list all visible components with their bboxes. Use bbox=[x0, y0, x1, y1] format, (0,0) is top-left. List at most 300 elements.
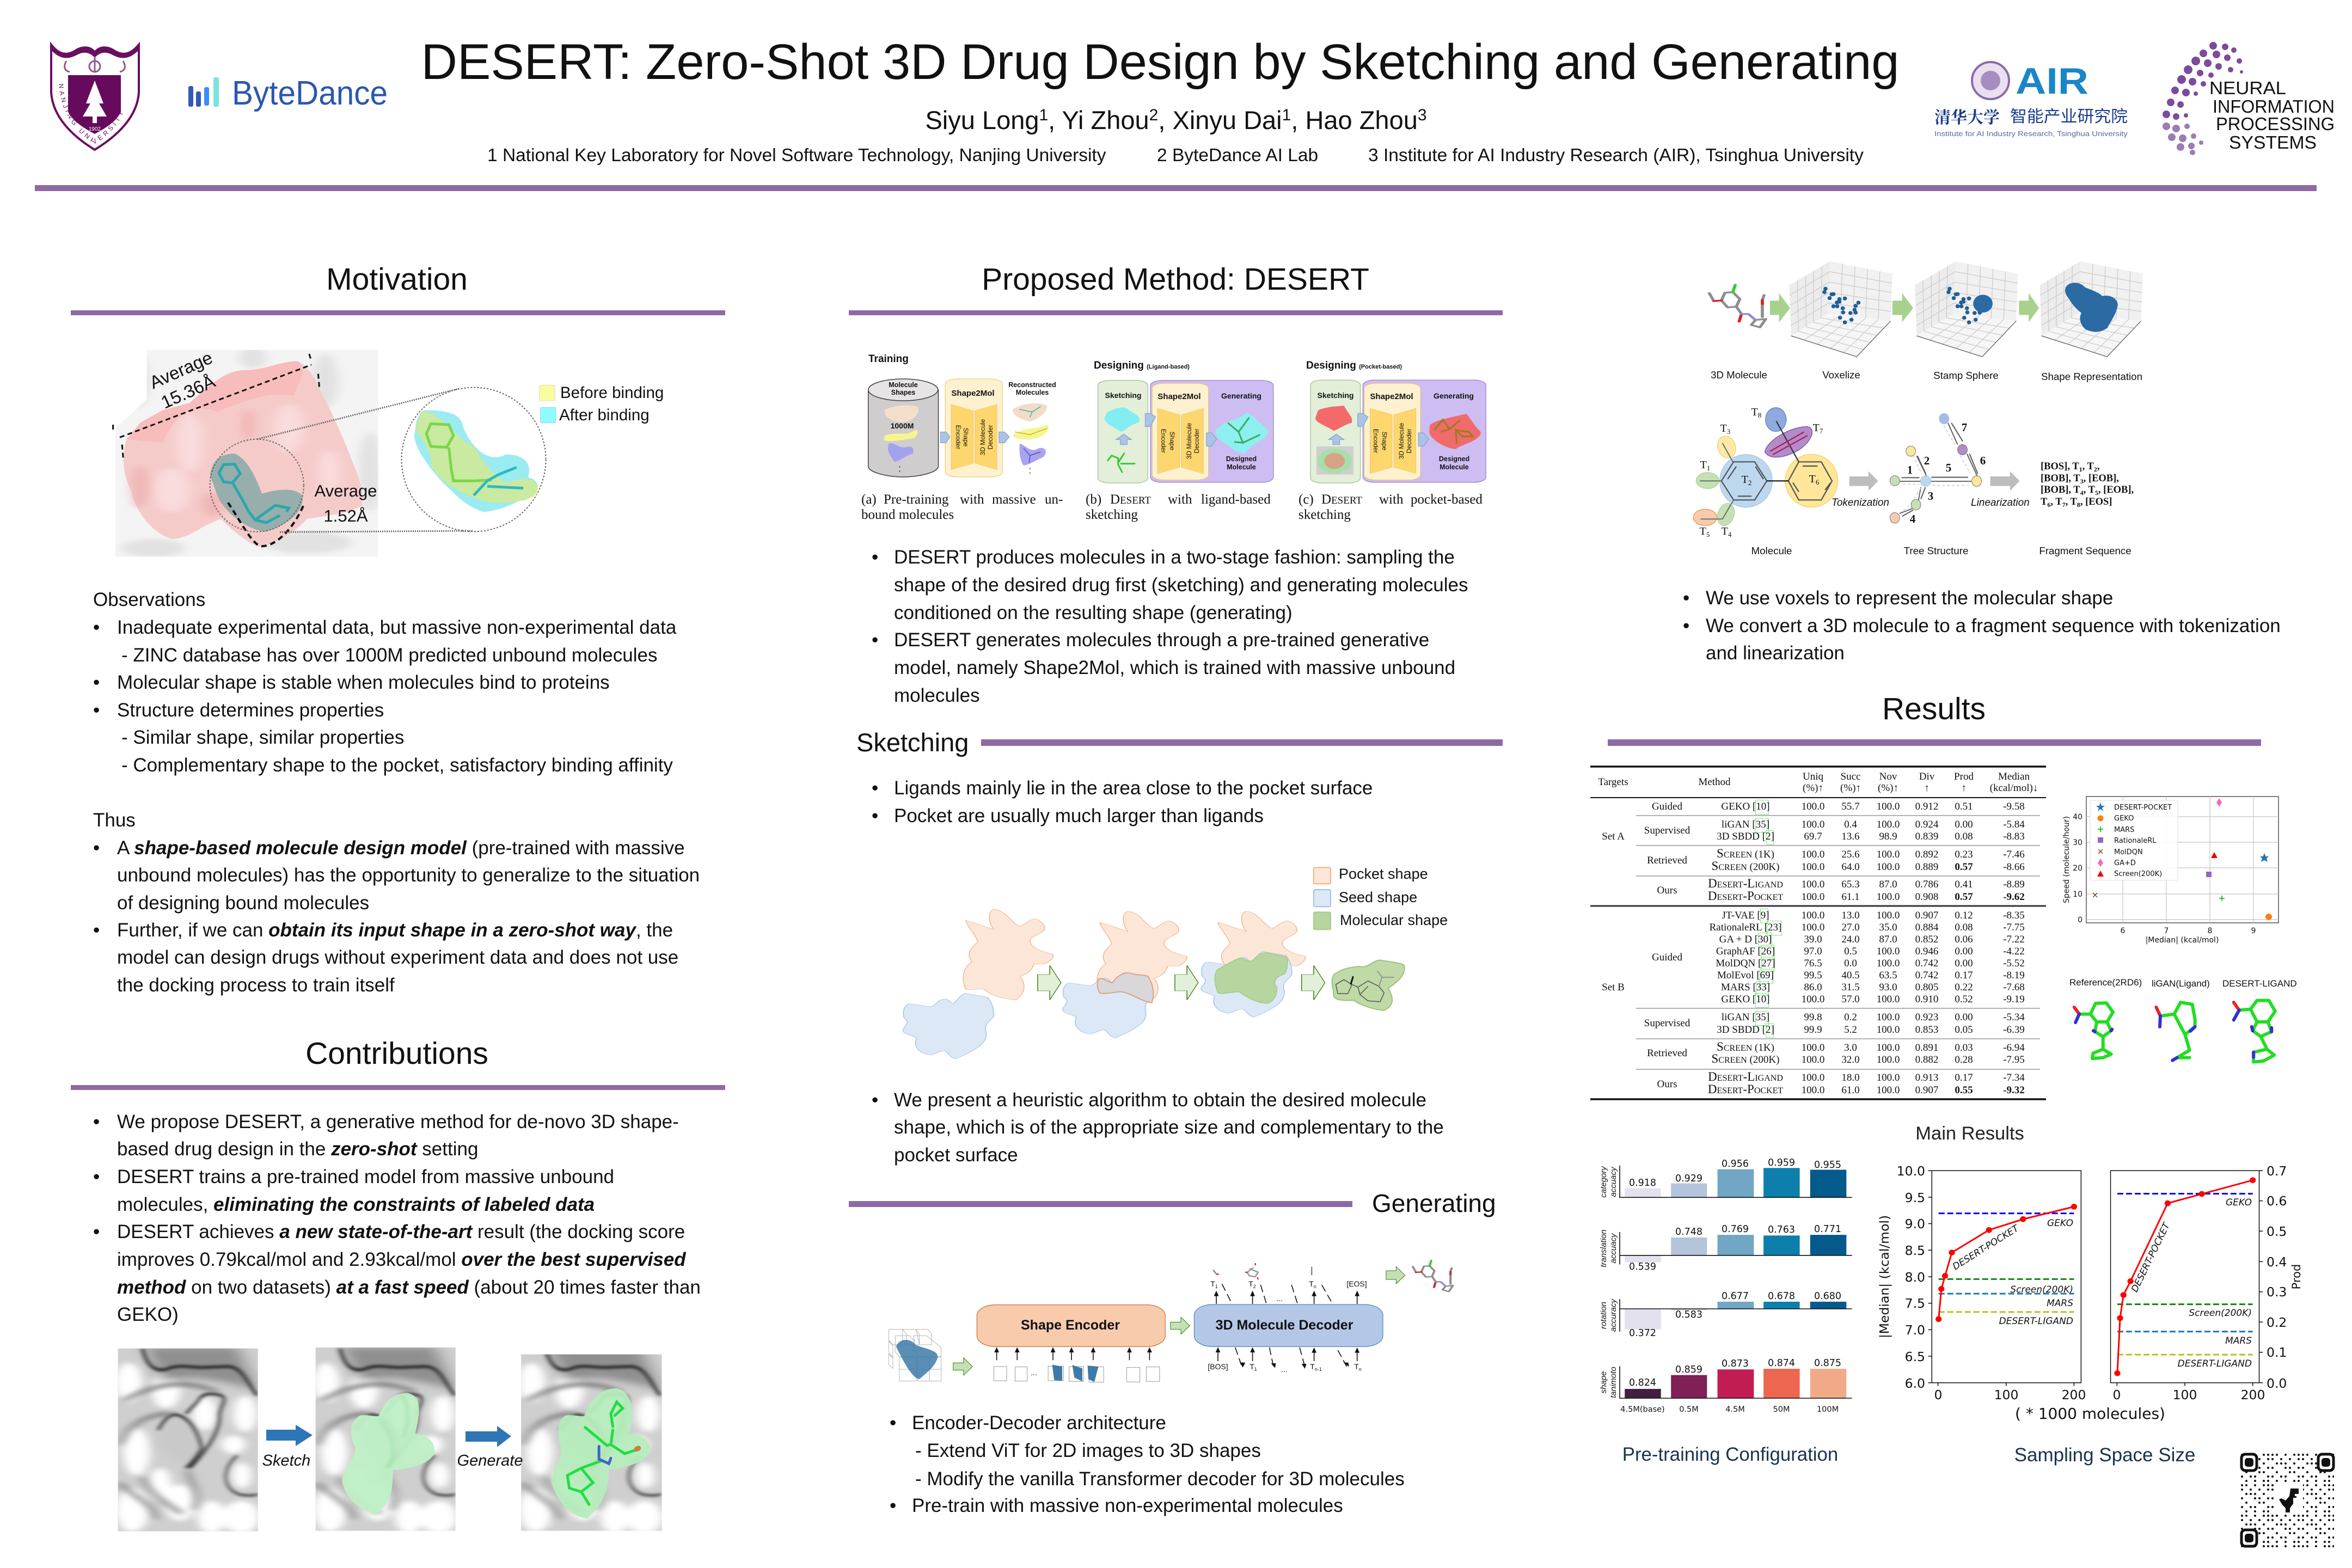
table rows: set B: 0.2 bbox=[1844, 1012, 1857, 1023]
text block: architecture notes bbox=[890, 1412, 1405, 1516]
table rows: set B: 100.0 bbox=[1877, 1012, 1900, 1023]
bar metric labels: accuacy bbox=[1609, 1233, 1618, 1264]
bar value labels bbox=[1629, 1157, 1841, 1388]
table rows: set B: 99.8 bbox=[1804, 1012, 1822, 1023]
label: Generate: Generate bbox=[457, 1452, 523, 1469]
table group labels: Ours bbox=[1657, 885, 1677, 896]
text block: observations: Observations bbox=[93, 589, 205, 610]
table rows: set B: 63.5 bbox=[1879, 970, 1897, 981]
table rows: set B: 100.0 bbox=[1802, 922, 1824, 933]
table rows: set A: 0.912 bbox=[1915, 801, 1938, 812]
scatter legend: Screen(200K) bbox=[2114, 870, 2162, 878]
heading: Sketching: Sketching bbox=[856, 728, 969, 757]
chart tick labels: 100 bbox=[2173, 1387, 2197, 1402]
chart tick labels: 0 bbox=[2113, 1387, 2121, 1402]
table rows: set B: 100.0 bbox=[1802, 994, 1824, 1005]
table rows: set A: 100.0 bbox=[1802, 861, 1824, 873]
title: DESERT: Zero-Shot 3D Drug Design by Sketching and Generating bbox=[421, 34, 1899, 90]
logo: Nanjing University crest: 1902 bbox=[89, 126, 101, 132]
token labels: 1 bbox=[1215, 1284, 1218, 1289]
heading: Generating: Generating bbox=[1372, 1189, 1496, 1217]
diagram labels: Sketching bbox=[1105, 391, 1141, 400]
text block: method description: model, namely Shape2Mol, which is trained with massive unbound bbox=[894, 657, 1455, 678]
captions: Pre-training bbox=[884, 492, 949, 507]
table rows: set A: 0.4 bbox=[1844, 819, 1857, 830]
authors: 3 bbox=[1418, 106, 1427, 124]
text block: sketching notes bbox=[872, 777, 1373, 826]
table rows: set A: 69.7 bbox=[1804, 831, 1822, 842]
table rows: set A: -8.89 bbox=[2003, 879, 2025, 890]
figure: pocket and ligand shape: 15.36Å bbox=[158, 371, 218, 413]
fragment sequence: [BOB], T bbox=[2041, 485, 2080, 495]
table rows: set A: 0.51 bbox=[1955, 801, 1973, 812]
affiliations: 2 ByteDance AI Lab bbox=[1157, 145, 1318, 166]
chart tick labels: 0.4 bbox=[2267, 1254, 2287, 1270]
text block: method description: DESERT generates molecules through a pre-trained generative bbox=[894, 629, 1429, 651]
heading: Contributions: Contributions bbox=[305, 1036, 488, 1071]
bar value labels: 0.680 bbox=[1814, 1291, 1841, 1302]
image: pocket with generated molecule bbox=[521, 1355, 662, 1531]
text block: representation notes: • bbox=[1683, 615, 1689, 636]
scatter axis labels: 40 bbox=[2073, 813, 2082, 822]
scatter axis labels: 10 bbox=[2073, 890, 2082, 899]
table rows: set A: -5.84 bbox=[2003, 819, 2025, 830]
text block: observations: - Complementary shape to the pocket, satisfactory binding affinity bbox=[121, 755, 673, 776]
heading: Results: Results bbox=[1882, 691, 1986, 726]
token labels: T bbox=[1354, 1362, 1359, 1371]
bar metric labels: category bbox=[1599, 1166, 1608, 1198]
text block: representation notes: We convert a 3D molecule to a fragment sequence with tokenization bbox=[1706, 615, 2281, 636]
text block: contributions list: improves 0.79kcal/mol and 2.93kcal/mol over the best supervised bbox=[117, 1249, 686, 1270]
text block: observations: • bbox=[93, 617, 100, 638]
chart line labels: DESERT-LIGAND bbox=[2178, 1358, 2252, 1369]
bar value labels: 0.956 bbox=[1722, 1159, 1749, 1169]
fragment sequence: , T bbox=[2084, 485, 2096, 495]
fragment sequence: T bbox=[2041, 497, 2047, 507]
table rows: set B: 31.5 bbox=[1841, 982, 1860, 993]
table rows: set B: 0.913 bbox=[1915, 1072, 1938, 1083]
table header bbox=[1598, 771, 2038, 794]
table rows: set B: 0.22 bbox=[1955, 982, 1973, 993]
panel: shape and fragment representation bbox=[1683, 261, 2281, 664]
table rows: set B: GraphAF [26] bbox=[1716, 946, 1775, 957]
bar value labels: 0.874 bbox=[1768, 1358, 1795, 1369]
arrow: generate bbox=[465, 1426, 511, 1447]
captions: DESERT bbox=[1321, 492, 1362, 507]
bar metric labels: rotation bbox=[1599, 1302, 1608, 1329]
diagram labels: Molecule bbox=[1440, 463, 1469, 471]
table rows: set B: 0.923 bbox=[1915, 1012, 1938, 1023]
bar value labels: 0.873 bbox=[1722, 1358, 1749, 1369]
bar value labels: 0.539 bbox=[1629, 1261, 1656, 1272]
captions: massive bbox=[992, 492, 1036, 507]
captions: bound molecules bbox=[861, 507, 954, 522]
fragment sequence: , T bbox=[2050, 497, 2062, 507]
diagram labels: 3D Molecule bbox=[1185, 422, 1193, 459]
table rows: set B: 100.0 bbox=[1877, 1072, 1900, 1083]
text block: heuristic algorithm: We present a heuristic algorithm to obtain the desired molecule bbox=[894, 1089, 1426, 1111]
table rows: set A: 100.0 bbox=[1802, 849, 1824, 860]
panel: Sketching bbox=[856, 728, 1503, 1166]
diagram labels: Decoder bbox=[1193, 428, 1200, 454]
text block: contributions list: • bbox=[93, 1221, 100, 1242]
table rows: set B: -9.19 bbox=[2003, 994, 2025, 1005]
table group labels: Retrieved bbox=[1647, 1048, 1687, 1059]
authors: , Hao Zhou bbox=[1291, 106, 1418, 134]
table group labels: Supervised bbox=[1644, 1018, 1690, 1029]
table rows: set A: 0.892 bbox=[1915, 849, 1938, 860]
logo: Tsinghua AIR bbox=[1934, 60, 2128, 138]
diagram labels: Encoder bbox=[1372, 429, 1380, 453]
label: Training: Training bbox=[868, 353, 909, 365]
chart: median vs sampling size: DESERT-POCKET bbox=[1951, 1223, 2022, 1272]
table rows: set A: 100.0 bbox=[1877, 801, 1900, 812]
tree step numbers: 5 bbox=[1946, 461, 1951, 474]
chart line labels bbox=[2178, 1197, 2252, 1369]
labels: Voxelize bbox=[1822, 369, 1860, 381]
captions: un- bbox=[1045, 492, 1063, 507]
bar value labels: 0.875 bbox=[1814, 1358, 1841, 1369]
bar metric labels bbox=[1599, 1166, 1618, 1398]
image: empty pocket surface bbox=[118, 1348, 258, 1532]
diagram labels: Encoder bbox=[954, 425, 962, 449]
table rows: set A: 100.0 bbox=[1877, 849, 1900, 860]
table rows: set B: 0.742 bbox=[1915, 958, 1938, 969]
chart tick labels: 0 bbox=[1934, 1387, 1942, 1402]
token labels: T bbox=[1310, 1362, 1315, 1371]
logo: ByteDance: ByteDance bbox=[232, 75, 388, 112]
table rows: set B: -5.34 bbox=[2003, 1012, 2025, 1023]
label: Designing ligand-based: Designing (Ligand-based) bbox=[1094, 360, 1190, 371]
bar value labels: 0.859 bbox=[1675, 1364, 1702, 1375]
text block: architecture notes: Encoder-Decoder architecture bbox=[912, 1412, 1166, 1434]
table rows: set B: 76.5 bbox=[1804, 958, 1822, 969]
table rows: set B: 35.0 bbox=[1879, 922, 1897, 933]
chart tick labels: 8.5 bbox=[1905, 1243, 1925, 1258]
scatter axis labels: 9 bbox=[2251, 927, 2256, 935]
table rows: set B: 100.0 bbox=[1877, 910, 1900, 921]
bar value labels: 0.677 bbox=[1722, 1291, 1749, 1302]
chart tick labels: 200 bbox=[2241, 1387, 2265, 1402]
table rows: set B: 100.0 bbox=[1802, 1042, 1824, 1054]
table rows: set B: 99.5 bbox=[1804, 970, 1822, 981]
fragment sequence bbox=[2041, 461, 2134, 509]
table rows: set B: -8.35 bbox=[2003, 910, 2025, 921]
diagram labels: Generating bbox=[1434, 391, 1474, 400]
table header: Method bbox=[1698, 776, 1731, 788]
fragment sequence: 3 bbox=[2080, 477, 2084, 485]
table rows: set A: 64.0 bbox=[1841, 861, 1860, 873]
diagram labels bbox=[889, 381, 1474, 471]
logo: Neural Information Processing Systems bbox=[2163, 42, 2335, 155]
table rows: set A: 0.908 bbox=[1915, 891, 1938, 903]
chart tick labels: |Median| (kcal/mol) bbox=[1877, 1215, 1892, 1338]
text block: thus: model can design drugs without experiment data and does not use bbox=[117, 947, 678, 968]
text block: thus: Thus bbox=[93, 810, 136, 831]
labels: Stamp Sphere bbox=[1933, 370, 1999, 381]
panel: Proposed Method bbox=[849, 262, 1503, 706]
captions: sketching bbox=[1298, 507, 1351, 522]
text block: contributions list: method on two datasets) at a fast speed (about 20 times faster than bbox=[117, 1277, 701, 1298]
text block: representation notes: and linearization bbox=[1706, 642, 1845, 664]
bar value labels: 0.959 bbox=[1768, 1157, 1795, 1168]
figure: ligand comparison bbox=[2069, 977, 2297, 1062]
diagram labels: Shape bbox=[1381, 432, 1388, 451]
panel: Results bbox=[1590, 691, 2303, 1466]
diagram labels: Molecule bbox=[1227, 463, 1256, 471]
token labels: T bbox=[1248, 1279, 1253, 1288]
table rows: set B: 100.0 bbox=[1877, 1085, 1900, 1096]
table rows: set B: 0.52 bbox=[1955, 994, 1973, 1005]
diagram labels: Shape2Mol bbox=[1370, 392, 1413, 401]
molecule token labels bbox=[1700, 406, 1823, 538]
table rows: set B: 0.742 bbox=[1915, 970, 1938, 981]
labels: tokenization and linearization: Linearization bbox=[1971, 497, 2030, 509]
text block: thus: A shape-based molecule design model (pre-trained with massive bbox=[117, 837, 685, 859]
axis label: molecules: ( * 1000 molecules) bbox=[2015, 1405, 2165, 1423]
fragment sequence: , [EOS] bbox=[2080, 497, 2112, 507]
label: Sampling Space Size: Sampling Space Size bbox=[2014, 1444, 2195, 1466]
table rows: set B: GA + D [30] bbox=[1719, 934, 1772, 945]
table rows: set A: 100.0 bbox=[1802, 801, 1824, 812]
fragment sequence: 5 bbox=[2095, 489, 2098, 497]
scatter axis labels: Speed (molecule/hour) bbox=[2062, 816, 2071, 903]
text block: thus: Further, if we can obtain its input shape in a zero-shot way, the bbox=[117, 920, 673, 941]
QR code bbox=[2240, 1453, 2334, 1547]
table rows: set B: Desert-Ligand bbox=[1708, 1070, 1783, 1083]
logo: Neural Information Processing Systems: INFORMATION bbox=[2213, 96, 2335, 117]
bar category labels: 0.5M bbox=[1679, 1405, 1699, 1414]
tree step numbers: 6 bbox=[1980, 454, 1986, 467]
logo: Neural Information Processing Systems: SYSTEMS bbox=[2229, 132, 2317, 152]
table rows: set B: -7.75 bbox=[2003, 922, 2025, 933]
chart tick labels: 0.0 bbox=[2267, 1376, 2287, 1391]
chart line labels bbox=[1999, 1218, 2073, 1327]
authors: Siyu Long bbox=[925, 106, 1039, 134]
table rows: set B: 0.03 bbox=[1955, 1042, 1973, 1054]
legend: pocket shape: Pocket shape bbox=[1339, 866, 1428, 882]
fragment sequence: 7 bbox=[2062, 501, 2066, 509]
scatter legend: GEKO bbox=[2114, 814, 2134, 823]
chart tick labels: 9.5 bbox=[1905, 1190, 1925, 1205]
captions: with bbox=[1168, 492, 1192, 507]
bar value labels: 0.929 bbox=[1675, 1173, 1702, 1184]
token labels: ... bbox=[1281, 1365, 1288, 1374]
chart tick labels: 6.5 bbox=[1905, 1349, 1925, 1364]
text block: observations bbox=[93, 589, 677, 776]
table group labels: Supervised bbox=[1644, 825, 1690, 836]
legend: molecular shape: Molecular shape bbox=[1340, 912, 1448, 928]
logo: Tsinghua AIR: 智能产业研究院 bbox=[2010, 108, 2128, 126]
table rows: set A: 0.57 bbox=[1955, 891, 1973, 903]
chart tick labels: 0.3 bbox=[2267, 1284, 2287, 1300]
table rows: set B: 13.0 bbox=[1841, 910, 1860, 921]
chart tick labels: Prod bbox=[2290, 1264, 2303, 1289]
table rows: set B: 100.0 bbox=[1877, 994, 1900, 1005]
text block: architecture notes: - Extend ViT for 2D images to 3D shapes bbox=[915, 1440, 1261, 1461]
labels: 3D Molecule bbox=[1711, 369, 1767, 381]
table rows: set B: 0.910 bbox=[1915, 994, 1938, 1005]
chart: prod vs sampling size bbox=[2111, 1163, 2303, 1402]
scatter points bbox=[2093, 798, 2272, 920]
captions: pocket-based bbox=[1411, 492, 1483, 507]
table rows: set B: Screen (1K) bbox=[1717, 1040, 1774, 1054]
scatter axis labels bbox=[2062, 813, 2256, 945]
table rows: set A: -8.83 bbox=[2003, 831, 2025, 842]
chart tick labels: 7.5 bbox=[1905, 1296, 1925, 1311]
label: Pre-training Configuration: Pre-training Configuration bbox=[1622, 1444, 1838, 1465]
text block: observations: Molecular shape is stable when molecules bind to proteins bbox=[117, 672, 610, 693]
table rows: set A: 100.0 bbox=[1877, 861, 1900, 873]
table group labels: Retrieved bbox=[1647, 855, 1687, 866]
table rows: set A: 25.6 bbox=[1841, 849, 1860, 860]
diagram: encoder decoder architecture bbox=[889, 1260, 1453, 1382]
table rows: set B: 57.0 bbox=[1841, 994, 1860, 1005]
text block: thus bbox=[93, 810, 700, 996]
table rows: set B: -6.39 bbox=[2003, 1024, 2025, 1036]
fragment sequence: [BOS], T bbox=[2041, 461, 2079, 472]
chart tick labels: 7.0 bbox=[1905, 1322, 1925, 1338]
token labels: T bbox=[1250, 1362, 1254, 1371]
table rows: set A: Screen (1K) bbox=[1717, 847, 1774, 860]
table rows: set B: 39.0 bbox=[1804, 934, 1822, 945]
table rows: set B: 0.28 bbox=[1955, 1054, 1973, 1065]
token labels: ... bbox=[1276, 1294, 1283, 1303]
table rows: set B: 0.00 bbox=[1955, 1012, 1973, 1023]
scatter legend: GA+D bbox=[2114, 859, 2136, 867]
text block: representation notes: We use voxels to represent the molecular shape bbox=[1706, 587, 2113, 609]
figure: sketch and generate surfaces bbox=[111, 1345, 672, 1535]
table rows: set B: -7.68 bbox=[2003, 982, 2025, 993]
labels: molecule, tree, sequence: Molecule bbox=[1751, 545, 1792, 556]
diagram labels: Decoder bbox=[987, 425, 994, 450]
table rows: set A: 0.57 bbox=[1955, 861, 1973, 873]
table rows: set B: RationaleRL [23] bbox=[1710, 922, 1781, 933]
diagram labels: Reconstructed bbox=[1008, 381, 1056, 389]
table rows: set A: 0.41 bbox=[1955, 879, 1973, 890]
table rows: set B: 100.0 bbox=[1877, 1054, 1900, 1065]
molecule token labels: 5 bbox=[1706, 530, 1710, 538]
table rows: set B: 86.0 bbox=[1804, 982, 1822, 993]
chart line labels: MARS bbox=[2225, 1336, 2252, 1346]
scatter axis labels: 30 bbox=[2073, 838, 2082, 847]
captions: with bbox=[1379, 492, 1404, 507]
table rows: set B: -5.52 bbox=[2003, 958, 2025, 969]
fragment sequence: , T bbox=[2082, 461, 2094, 472]
bar metric labels: translation bbox=[1599, 1229, 1608, 1267]
fragment sequence: 6 bbox=[2047, 501, 2050, 509]
table rows: set A: Desert-Ligand bbox=[1708, 877, 1783, 890]
bar value labels: 0.918 bbox=[1629, 1178, 1656, 1189]
results table bbox=[1590, 767, 2046, 1099]
token labels: n-1 bbox=[1315, 1367, 1322, 1372]
diagram labels: 3D Molecule bbox=[979, 419, 987, 455]
text block: thus: • bbox=[93, 837, 100, 859]
table rows: set B: 0.17 bbox=[1955, 1072, 1973, 1083]
panel: Generating bbox=[849, 1189, 1496, 1516]
captions: (c) bbox=[1298, 492, 1314, 507]
table rows: set B: 3.0 bbox=[1844, 1042, 1857, 1054]
text block: architecture notes: Pre-train with massive non-experimental molecules bbox=[912, 1495, 1343, 1516]
text block: sketching notes: Pocket are usually much larger than ligands bbox=[894, 805, 1264, 826]
table rows: set B: 0.907 bbox=[1915, 1085, 1938, 1096]
table rows: set B: 100.0 bbox=[1877, 946, 1900, 957]
text block: sketching notes: • bbox=[872, 805, 878, 826]
table rows: set B: 40.5 bbox=[1841, 970, 1860, 981]
label: Sketch: Sketch bbox=[262, 1452, 310, 1469]
bar value labels: 0.824 bbox=[1629, 1377, 1656, 1388]
table header: (kcal/mol)↓ bbox=[1990, 782, 2038, 794]
table rows: set A: 0.00 bbox=[1955, 819, 1973, 830]
table header: (%)↑ bbox=[1803, 782, 1823, 794]
bar metric labels: shape bbox=[1599, 1371, 1608, 1393]
table rows: set A: -9.62 bbox=[2003, 891, 2025, 903]
figure: ligand comparison: liGAN(Ligand) bbox=[2152, 978, 2210, 989]
label: Shape Encoder: Shape Encoder bbox=[1021, 1318, 1120, 1333]
table rows: set A: 100.0 bbox=[1802, 819, 1824, 830]
text block: observations: - ZINC database has over 1000M predicted unbound molecules bbox=[121, 645, 657, 666]
captions: ligand-based bbox=[1201, 492, 1271, 507]
table rows: set A: -9.58 bbox=[2003, 801, 2025, 812]
chart tick labels: 200 bbox=[2062, 1387, 2086, 1402]
chart line labels: MARS bbox=[2047, 1298, 2073, 1309]
text block: sketching notes: • bbox=[872, 777, 878, 799]
table rows: set A: 100.0 bbox=[1877, 819, 1900, 830]
text block: observations: Inadequate experimental data, but massive non-experimental data bbox=[117, 617, 677, 638]
table header: Prod bbox=[1954, 771, 1974, 782]
table rows: set B: 0.00 bbox=[1955, 958, 1973, 969]
authors: , Xinyu Dai bbox=[1158, 106, 1282, 134]
measurement labels: Average bbox=[146, 347, 216, 393]
table rows: set B: -7.22 bbox=[2003, 934, 2025, 945]
text block: observations: - Similar shape, similar properties bbox=[121, 727, 404, 748]
diagram labels: Molecules bbox=[1016, 389, 1049, 396]
captions: DESERT bbox=[1110, 492, 1151, 507]
scatter axis labels: 6 bbox=[2121, 927, 2126, 935]
text block: architecture notes: - Modify the vanilla Transformer decoder for 3D molecules bbox=[915, 1468, 1405, 1490]
scatter axis labels: 20 bbox=[2073, 864, 2082, 873]
text block: heuristic algorithm: pocket surface bbox=[894, 1144, 1018, 1166]
text block: heuristic algorithm bbox=[872, 1089, 1444, 1166]
table rows: set A: 100.0 bbox=[1877, 891, 1900, 903]
diagram labels: Encoder bbox=[1160, 429, 1167, 453]
token labels bbox=[1031, 1279, 1367, 1377]
table rows: set B: 100.0 bbox=[1802, 1072, 1824, 1083]
diagram labels: Shape bbox=[1168, 432, 1176, 451]
table rows: set B: 97.0 bbox=[1804, 946, 1822, 957]
fragment sequence: , bbox=[2097, 461, 2099, 472]
bar metric labels: tanimoto bbox=[1609, 1367, 1618, 1398]
molecule token labels: T bbox=[1751, 406, 1758, 418]
table rows: set A: 87.0 bbox=[1879, 879, 1897, 890]
bar metric labels: accuracy bbox=[1609, 1298, 1618, 1332]
table rows: set A: Screen (200K) bbox=[1712, 859, 1779, 873]
scatter axis labels: 8 bbox=[2208, 927, 2212, 935]
labels: Shape Representation bbox=[2041, 371, 2142, 382]
figure: pocket and ligand shape: 1.52Å bbox=[323, 506, 368, 525]
table group labels: Ours bbox=[1657, 1079, 1677, 1090]
table rows: set A: 0.839 bbox=[1915, 831, 1938, 842]
token labels: 2 bbox=[1253, 1284, 1256, 1289]
table rows: set B bbox=[1708, 910, 2025, 1096]
logo: Nanjing University crest bbox=[50, 41, 140, 151]
diagram labels: 3D Molecule bbox=[1398, 422, 1405, 459]
arrow: sketch bbox=[266, 1425, 313, 1446]
molecule token labels: 7 bbox=[1820, 427, 1823, 435]
table rows: set B: 0.5 bbox=[1844, 946, 1857, 957]
table rows: set B: 100.0 bbox=[1802, 1054, 1824, 1065]
figure: pocket and ligand shape: After binding bbox=[559, 406, 650, 424]
